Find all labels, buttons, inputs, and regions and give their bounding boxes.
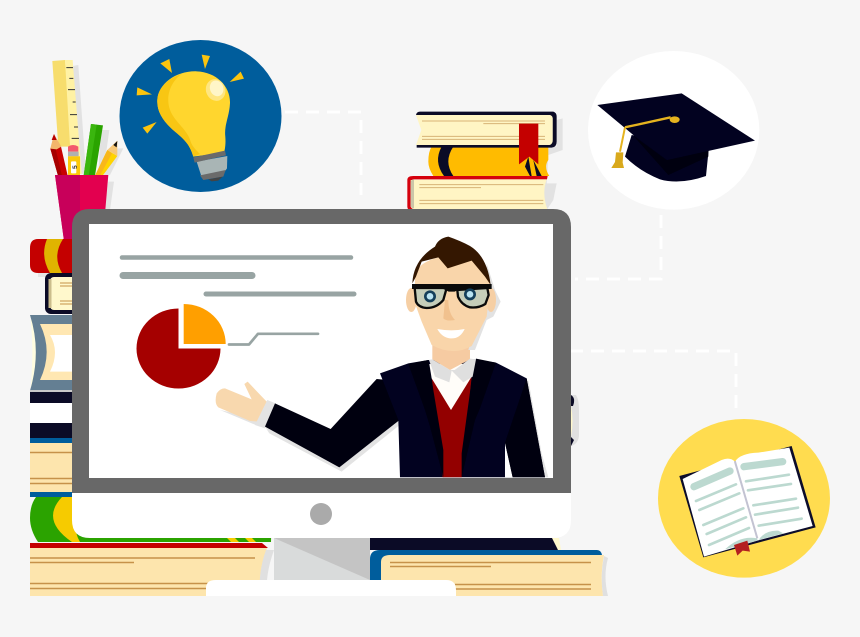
top book stack [407,112,563,212]
monitor stand [206,535,456,596]
teacher arm and hand [216,379,402,472]
teacher head [406,237,501,351]
grey blue book [30,315,80,391]
teacher torso [380,345,548,477]
slide text lines [122,258,354,294]
left book stack [30,239,274,596]
monitor [72,209,571,538]
icon: pencil cup with ruler and pencils [50,60,123,241]
icon: graduation cap in white circle [588,51,759,210]
icon: light bulb in blue circle [120,40,282,192]
icon: open book in yellow circle [658,419,830,578]
pie chart [136,304,318,389]
icon: pencil cup with ruler and pencils: 5 [72,165,79,169]
teacher [216,237,548,477]
right book stack [370,395,608,596]
monitor button [310,503,332,525]
